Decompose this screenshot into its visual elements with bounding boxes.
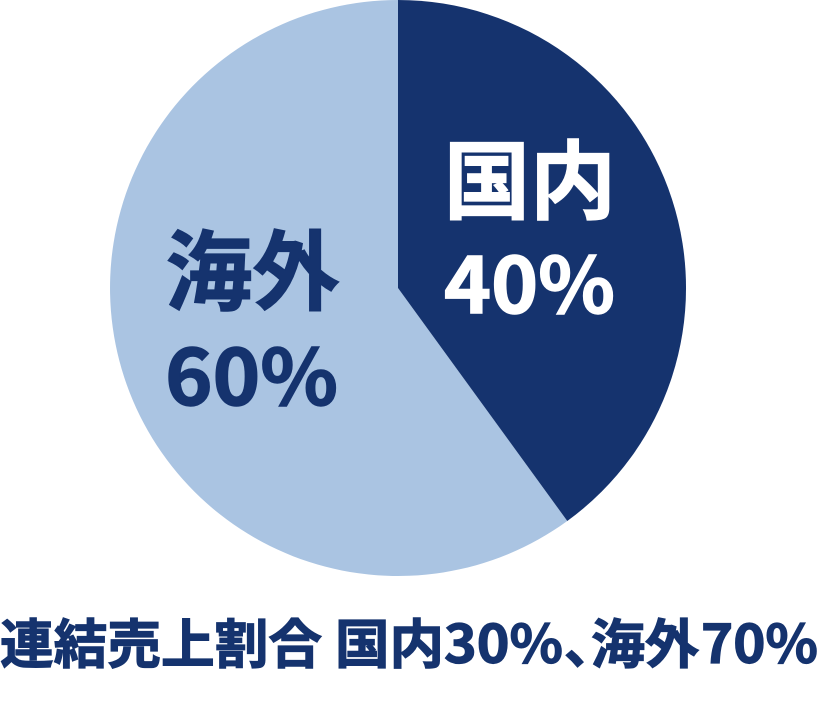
caption: consolidated sales ratio: 連結売上割合	[0, 603, 322, 679]
label: domestic: 国内	[444, 112, 616, 237]
caption: consolidated sales ratio: 30%	[444, 603, 563, 679]
label: overseas: 海外	[166, 203, 340, 329]
slice: domestic 40%	[398, 0, 686, 521]
caption: consolidated sales ratio: 70%	[701, 603, 818, 679]
value: overseas 60%: 60%	[165, 317, 338, 428]
value: domestic 40%: 40%	[444, 225, 615, 336]
slice: overseas 60%	[110, 0, 567, 576]
caption: consolidated sales ratio: 、	[564, 603, 617, 679]
caption: consolidated sales ratio	[0, 603, 818, 679]
caption: consolidated sales ratio: 国内	[335, 603, 444, 679]
caption: consolidated sales ratio: 海外	[591, 603, 699, 679]
